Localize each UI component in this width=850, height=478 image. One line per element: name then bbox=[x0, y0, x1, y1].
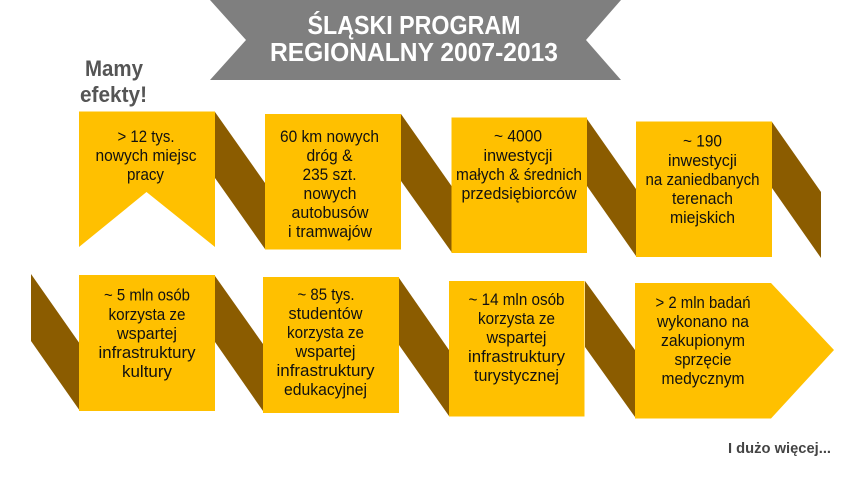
card: medical, with arrow head: medycznym bbox=[662, 370, 744, 388]
title banner bbox=[210, 0, 621, 80]
card: tourism: turystycznej bbox=[474, 367, 559, 385]
card: 12 tys. jobs: > 12 tys. bbox=[118, 128, 174, 146]
card: culture: infrastruktury bbox=[98, 344, 196, 362]
card: 190 investments: inwestycji bbox=[668, 152, 737, 170]
card: education: wspartej bbox=[295, 343, 356, 361]
card: 190 investments: na zaniedbanych bbox=[646, 171, 760, 189]
card: education: studentów bbox=[288, 305, 363, 323]
heading: Mamy efekty bbox=[80, 56, 147, 107]
closing note: I dużo więcej... bbox=[728, 440, 831, 457]
card: culture bbox=[79, 275, 215, 411]
card: roads and buses bbox=[265, 114, 401, 250]
connector ribbon 3 bbox=[587, 119, 636, 256]
connector ribbon 8 bbox=[585, 281, 635, 417]
card: culture: wspartej bbox=[116, 325, 177, 343]
card: education: ~ 85 tys. bbox=[298, 286, 354, 304]
connector ribbon 1 bbox=[215, 112, 265, 249]
card: education: edukacyjnej bbox=[284, 381, 367, 399]
card: education: infrastruktury bbox=[276, 362, 375, 380]
card: roads and buses: autobusów bbox=[292, 204, 369, 222]
connector ribbon 6 bbox=[215, 276, 263, 411]
card: tourism: wspartej bbox=[486, 329, 546, 347]
card: 4000 investments: ~ 4000 bbox=[494, 128, 542, 146]
title banner: REGIONALNY 2007-2013 bbox=[270, 39, 558, 67]
card: 190 investments: terenach bbox=[672, 190, 733, 208]
connector ribbon 2 bbox=[401, 114, 452, 252]
card: 190 investments bbox=[636, 122, 772, 257]
heading: Mamy efekty: efekty! bbox=[80, 82, 147, 107]
card: tourism: ~ 14 mln osób bbox=[468, 291, 564, 309]
connector ribbon 4 bbox=[772, 122, 821, 258]
card: tourism bbox=[449, 281, 584, 416]
heading: Mamy efekty: Mamy bbox=[85, 56, 144, 81]
card: roads and buses: dróg & bbox=[306, 147, 352, 165]
card: 4000 investments: inwestycji bbox=[484, 147, 552, 165]
card: roads and buses: nowych bbox=[304, 185, 356, 203]
card: 4000 investments: małych & średnich bbox=[456, 166, 582, 184]
card: roads and buses: i tramwajów bbox=[288, 223, 372, 241]
card: roads and buses: 235 szt. bbox=[302, 166, 356, 184]
card: education: korzysta ze bbox=[287, 324, 364, 342]
card: 12 tys. jobs: nowych miejsc bbox=[96, 147, 196, 165]
card: medical, with arrow head bbox=[635, 283, 834, 418]
card: 190 investments: ~ 190 bbox=[683, 132, 722, 150]
connector ribbon 5 (row start) bbox=[31, 274, 80, 411]
card: roads and buses: 60 km nowych bbox=[280, 128, 379, 146]
card: medical, with arrow head: > 2 mln badań bbox=[656, 294, 750, 312]
card: 12 tys. jobs: pracy bbox=[127, 166, 165, 184]
card: 12 tys. jobs bbox=[79, 112, 215, 247]
card: 190 investments: miejskich bbox=[670, 209, 735, 227]
card: education bbox=[263, 277, 399, 413]
card: medical, with arrow head: sprzęcie bbox=[674, 351, 732, 369]
connector ribbon 7 bbox=[399, 278, 449, 416]
card: medical, with arrow head: zakupionym bbox=[661, 332, 745, 350]
card: 4000 investments: przedsiębiorców bbox=[462, 185, 577, 203]
card: tourism: infrastruktury bbox=[468, 348, 566, 366]
title banner: ŚLĄSKI PROGRAM bbox=[308, 10, 520, 40]
card: medical, with arrow head: wykonano na bbox=[656, 313, 750, 331]
card: culture: ~ 5 mln osób bbox=[104, 286, 190, 304]
card: 4000 investments bbox=[452, 118, 587, 253]
card: culture: kultury bbox=[122, 363, 173, 381]
card: culture: korzysta ze bbox=[108, 306, 186, 324]
card: tourism: korzysta ze bbox=[478, 310, 555, 328]
